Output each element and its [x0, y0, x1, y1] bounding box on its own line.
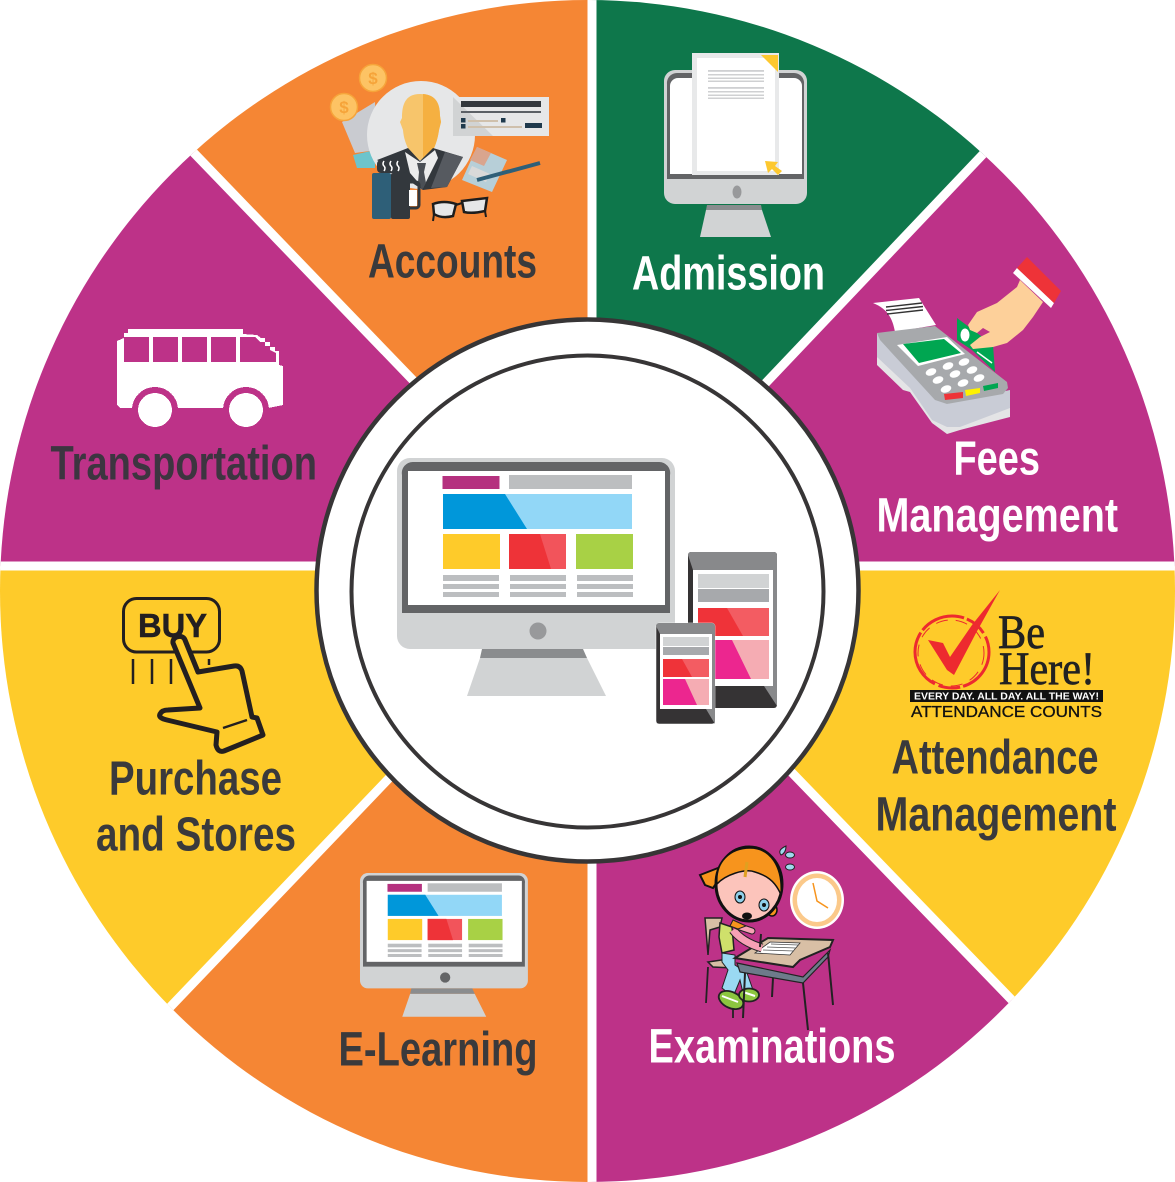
panel: attendance sector [794, 566, 1175, 1000]
panel: admission sector [592, 0, 984, 380]
panel: accounts sector [194, 0, 592, 378]
attendance management module [876, 590, 1117, 842]
label: attendance management: Attendance [892, 732, 1098, 784]
label: attendance management: Management [876, 788, 1117, 842]
icon: accountant with cheque, coffee and glasses: $ [339, 98, 349, 117]
icon: bus [117, 329, 283, 433]
icon: monitor with document [664, 53, 807, 237]
label: attendance management [876, 732, 1117, 842]
icon: accountant with cheque, coffee and glasses [330, 64, 549, 221]
icon: be here attendance logo: Be [998, 606, 1045, 659]
label: e-learning: E-Learning [338, 1024, 538, 1076]
label: transportation: Transportation [50, 438, 317, 490]
accounts module [330, 64, 549, 288]
admission module [632, 53, 825, 300]
fees management module [873, 257, 1118, 542]
examinations module [648, 846, 896, 1074]
icon: be here attendance logo: EVERY DAY. ALL DAY. ALL THE WAY! [914, 692, 1099, 702]
label: examinations: Examinations [648, 1020, 896, 1074]
e-learning module [338, 873, 538, 1076]
icon: be here attendance logo: Here! [999, 643, 1095, 695]
label: accounts: Accounts [368, 236, 537, 288]
icon: hand pressing buy button: BUY [138, 607, 207, 644]
label: admission: Admission [632, 248, 825, 300]
transportation module [50, 329, 317, 490]
purchase and stores module [96, 598, 296, 862]
panel: examinations sector [592, 776, 1012, 1182]
label: purchase and stores: and Stores [96, 808, 296, 862]
icon: card terminal with hand [873, 257, 1061, 434]
icon: be here attendance logo [910, 590, 1103, 721]
panel: fees sector [768, 154, 1174, 566]
panel: e-learning sector [170, 782, 592, 1182]
panel: transportation sector [0, 152, 410, 566]
icon: accountant with cheque, coffee and glasses: $ [368, 69, 378, 88]
label: purchase and stores [96, 752, 296, 862]
icon: hand pressing buy button [124, 598, 263, 751]
icon: be here attendance logo: ATTENDANCE COUNTS [911, 704, 1102, 721]
icon: tablet [688, 552, 777, 708]
icon: phone [656, 623, 715, 724]
label: fees management [876, 432, 1118, 542]
central hub [316, 320, 858, 862]
panel: purchase sector [0, 566, 386, 1007]
icon: small desktop monitor [360, 873, 528, 1017]
icon: girl at exam desk with clock [700, 846, 844, 1030]
icon: desktop monitor [397, 458, 675, 696]
label: purchase and stores: Purchase [109, 752, 282, 806]
label: fees management: Management [876, 490, 1118, 542]
label: fees management: Fees [954, 432, 1040, 486]
